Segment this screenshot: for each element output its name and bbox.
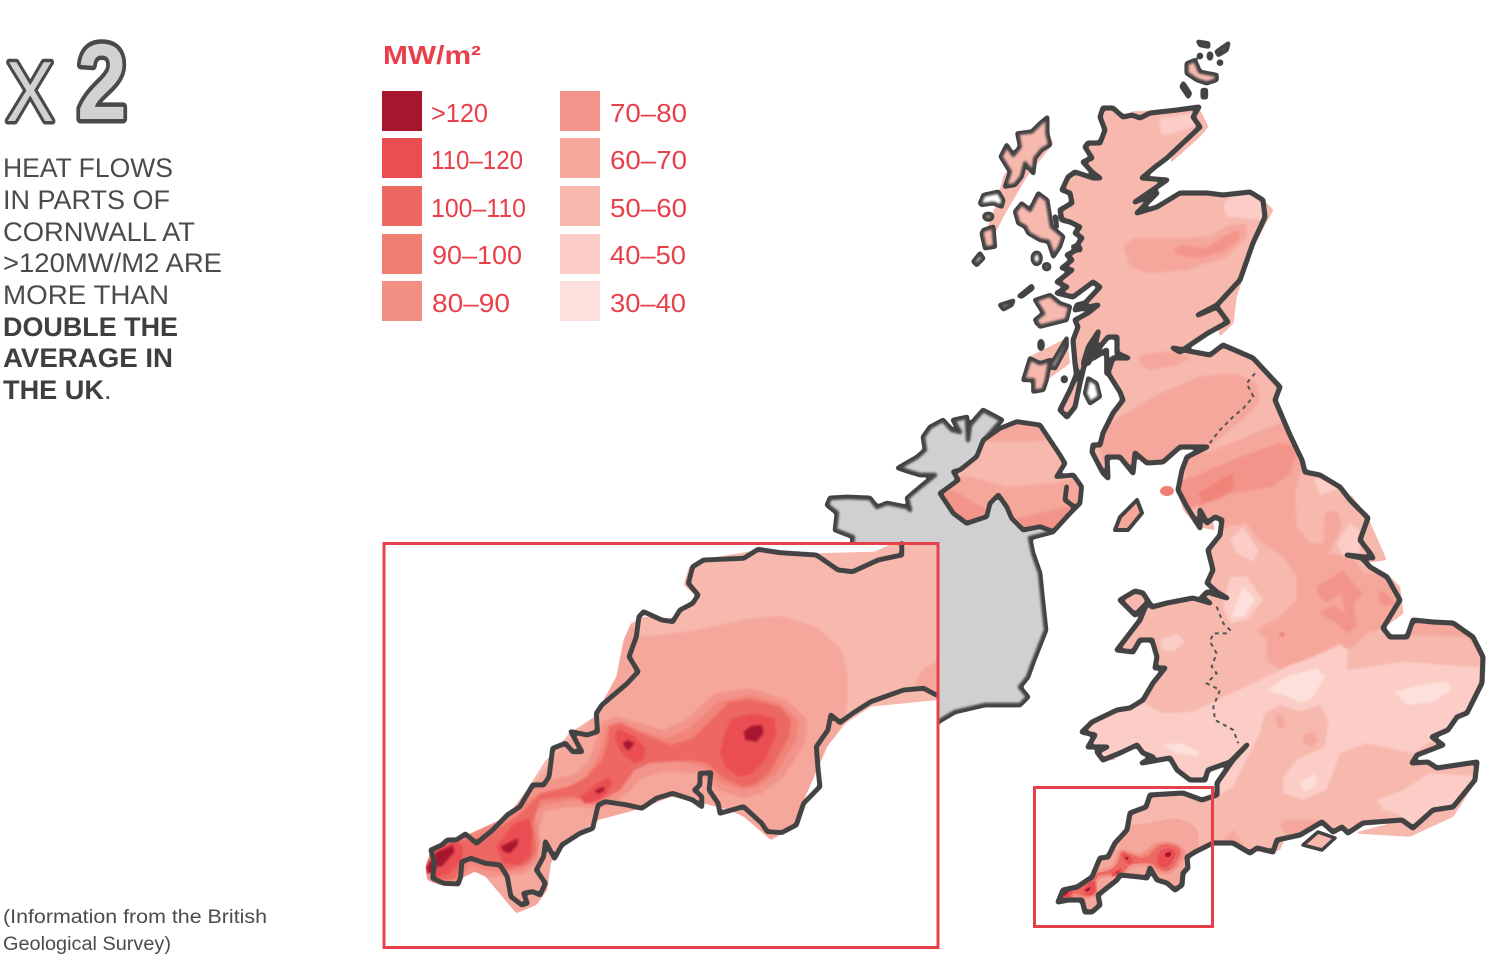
legend: heat flow scale in MW/m²: 100–110 — [431, 193, 526, 223]
inset heat zones — [425, 543, 938, 913]
source note: (Information from the British — [3, 907, 267, 928]
legend: heat flow scale in MW/m²: 40–50 — [610, 240, 686, 270]
text block: heat flow statement: . — [104, 375, 112, 405]
text block: heat flow statement: THE UK — [3, 375, 105, 405]
border: England and Wales — [1207, 607, 1238, 743]
map: Isle of Wight — [1303, 832, 1335, 850]
text block: heat flow statement: MORE THAN — [3, 280, 169, 310]
text block: heat flow statement: >120MW/M2 ARE — [3, 248, 222, 278]
map: Scottish islands — [973, 42, 1228, 403]
map: small south-west peninsula heat contours — [1060, 818, 1199, 910]
legend: heat flow scale in MW/m² — [382, 40, 687, 321]
legend: heat flow scale in MW/m²: 110–120 — [431, 145, 523, 175]
text block: heat flow statement: DOUBLE THE — [3, 312, 178, 342]
legend: heat flow scale in MW/m²: 60–70 — [610, 145, 687, 175]
map: England and Wales heat contours — [1060, 423, 1493, 910]
map: Northern Ireland heat zones — [944, 424, 1079, 528]
legend: heat flow scale in MW/m²: 70–80 — [610, 98, 687, 128]
source note — [3, 907, 267, 955]
inset frame — [384, 544, 938, 948]
legend: heat flow scale in MW/m²: 90–100 — [432, 240, 522, 270]
text block: heat flow statement: HEAT FLOWS — [3, 153, 173, 183]
border: England and Scotland — [1208, 373, 1255, 445]
map: Great Britain base heat zone — [1057, 107, 1483, 912]
multiplier heading: x2: 2 — [77, 21, 127, 142]
multiplier heading: x2: X — [6, 45, 54, 140]
locator box: south-west England — [1034, 788, 1212, 926]
text block: heat flow statement: AVERAGE IN — [3, 343, 173, 373]
legend title: MW/m² — [383, 40, 481, 70]
map: fill overhang beyond coasts — [982, 110, 1477, 853]
legend: heat flow scale in MW/m²: 50–60 — [610, 193, 687, 223]
map: Northern Ireland coastline — [940, 422, 1082, 532]
map: Scotland heat contours — [1100, 113, 1270, 480]
source note: Geological Survey) — [3, 934, 171, 955]
map: Isle of Man and Cumbrian patch — [1115, 486, 1174, 530]
map: Great Britain coastline — [1037, 107, 1483, 912]
text block: heat flow statement: IN PARTS OF — [3, 185, 170, 215]
inset panel: Devon and Cornwall enlarged — [384, 543, 938, 948]
multiplier heading: x2 — [6, 21, 127, 142]
text block: heat flow statement — [3, 153, 222, 405]
legend: heat flow scale in MW/m²: 80–90 — [432, 288, 510, 318]
map: Republic of Ireland in grey — [827, 410, 1053, 800]
inset coastline — [431, 543, 936, 905]
legend: heat flow scale in MW/m²: 30–40 — [610, 288, 686, 318]
legend: heat flow scale in MW/m²: >120 — [431, 98, 488, 128]
text block: heat flow statement: CORNWALL AT — [3, 217, 195, 247]
